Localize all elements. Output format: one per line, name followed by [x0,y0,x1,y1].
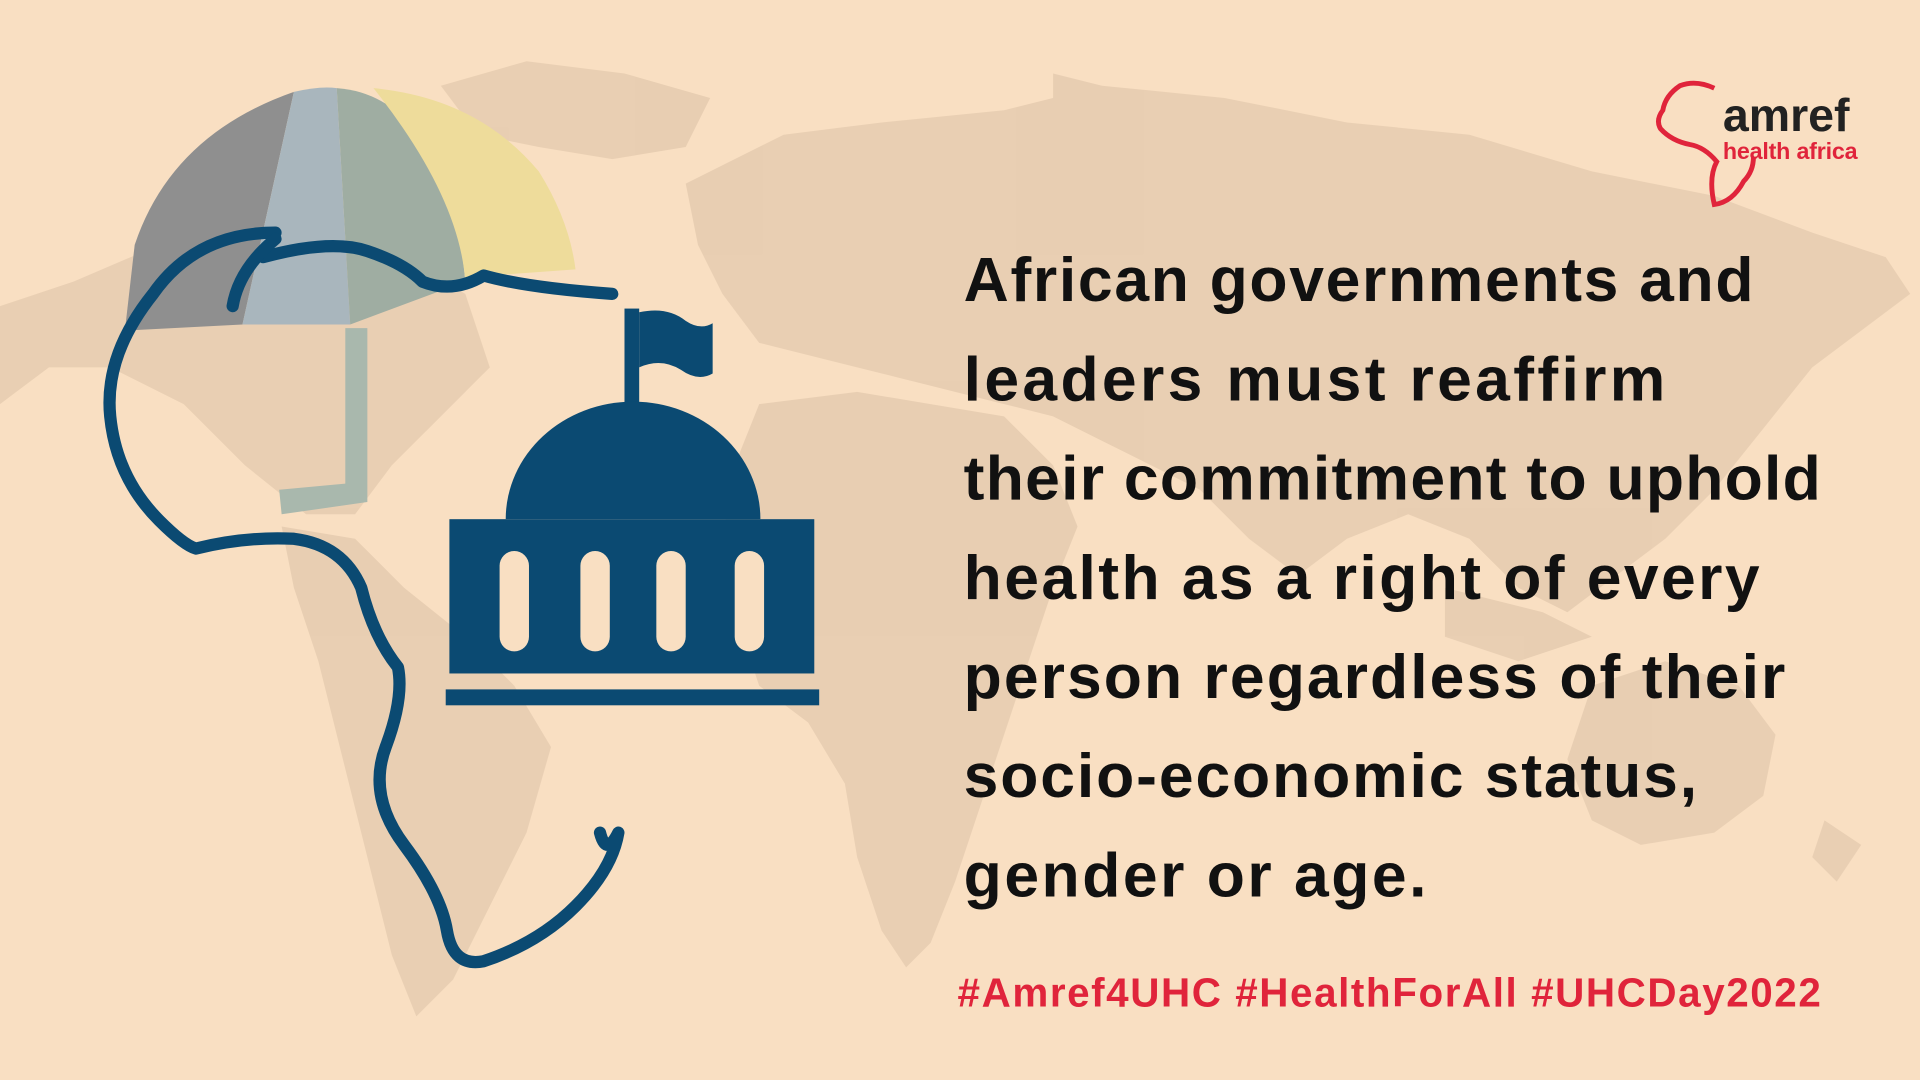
icon: umbrella [125,87,576,514]
icon: government building [446,309,819,705]
main statement text: their commitment to uphold [964,444,1821,514]
main statement text: socio-economic status, [964,741,1697,811]
main statement text: health as a right of every [964,543,1760,613]
main statement text [964,245,1821,910]
logo: amref health africa: health africa [1723,138,1859,164]
hashtags: #Amref4UHC #HealthForAll #UHCDay2022 [958,970,1821,1016]
logo: amref health africa: amref [1723,89,1850,141]
main statement text: leaders must reaffirm [964,344,1665,414]
icon: africa outline [110,233,618,962]
main statement text: African governments and [964,245,1753,315]
main statement text: person regardless of their [964,642,1785,712]
main statement text: gender or age. [964,840,1427,910]
logo: amref health africa [1658,83,1859,204]
